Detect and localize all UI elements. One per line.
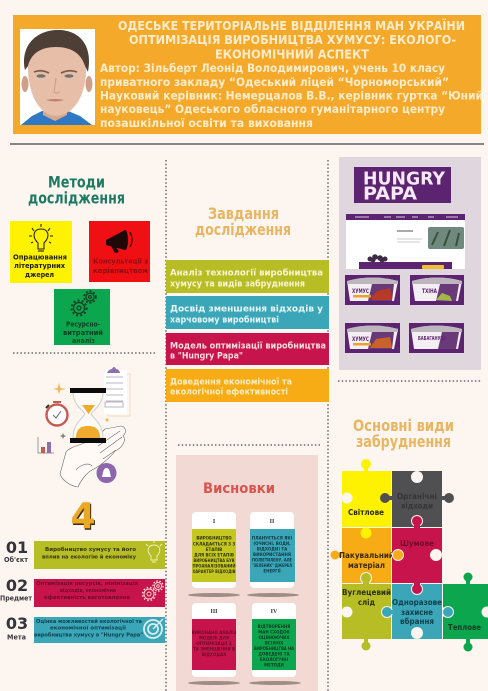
- card: conclusion III: МОДЕЛІ ДЛЯ: [199, 636, 229, 640]
- card: conclusion II: ВИКОРИСТАННЯ: [253, 552, 291, 557]
- card: conclusion I: ПРОАНАЛІЗОВАНИЙ: [192, 564, 236, 568]
- website screenshot: [346, 214, 465, 269]
- icon: sparkles: [53, 383, 108, 439]
- card: conclusion IV: ОЦІНЮЮЧИХ: [258, 635, 290, 640]
- row: subject: [0, 576, 165, 607]
- heading: pollution types: [353, 416, 454, 451]
- icon: target: [144, 619, 163, 638]
- product: hummus tub 4: [409, 323, 464, 353]
- card: conclusion III: ОПТИМІЗАЦІЇ З: [196, 641, 232, 646]
- card: consultation: Консультації з: [93, 256, 148, 266]
- card: conclusion IV: IV: [271, 609, 278, 615]
- card: conclusion II: ЕНЕРГІЇ: [263, 568, 281, 574]
- card: conclusion IV: ВИРОБНИЦТВА НА: [254, 646, 295, 651]
- card: conclusion I: ДЛЯ ВСІХ ЕТАПІВ: [194, 552, 234, 558]
- card: conclusion IV: МЕТОДИ: [264, 662, 284, 668]
- header author text: [100, 61, 483, 130]
- header title: ОПТИМІЗАЦІЯ ВИРОБНИЦТВА ХУМУСУ: ЕКОЛОГО-: [129, 33, 456, 47]
- row: object: Об'єкт: [4, 556, 28, 564]
- heading: conclusions: Висновки: [203, 481, 275, 497]
- piece: packaging: матеріал: [348, 560, 385, 570]
- row: goal: виробництва хумусу в "Hungry Papa": [34, 632, 143, 638]
- piece: disposable clothing: Одноразове: [392, 598, 443, 607]
- card: conclusion I: I: [213, 519, 216, 525]
- row: object: Виробництво хумусу та його: [45, 546, 136, 553]
- card: conclusion II: ВІДХОДИ) ТА: [257, 546, 288, 552]
- card: conclusion III: ВИКОНАНО АНАЛІЗ: [192, 630, 237, 635]
- task 3: в "Hungry Papa": [170, 352, 243, 362]
- card: conclusion III: III: [210, 609, 218, 615]
- card: resource analysis: аналіз: [72, 337, 95, 345]
- row: subject: Предмет: [0, 594, 32, 602]
- product: hummus tub 3: ХУМУС: [352, 336, 369, 343]
- header author text: приватного закладу “Одеський ліцей “Чорноморський”: [100, 75, 449, 89]
- heading: methods: дослідження: [28, 188, 125, 208]
- task 3: Модель оптимізації виробництва: [170, 340, 326, 352]
- card: conclusion II: "ЗЕЛЕНИХ" ДЖЕРЕЛ: [252, 563, 292, 568]
- piece: organic waste: Органічні: [397, 491, 437, 501]
- task 4: екологічної ефективності: [170, 386, 288, 398]
- row: object: вплив на екологію й економіку: [42, 554, 136, 560]
- card: conclusion I: ВИРОБНИЦТВО: [196, 536, 232, 540]
- number: four: 4: [71, 498, 97, 538]
- task 4: [166, 369, 329, 402]
- piece: packaging: Пакувальний: [339, 551, 394, 560]
- row: goal: [6, 614, 165, 643]
- logo: [354, 167, 451, 204]
- piece: noise: [392, 516, 442, 583]
- product: hummus tub 1: [345, 275, 400, 305]
- card: conclusion I: ЕТАПІВ: [206, 547, 222, 552]
- piece: carbon footprint: [342, 572, 391, 650]
- row: goal: економічної оптимізації: [50, 626, 126, 632]
- card: conclusion IV: ВІДТВОРЕННЯ: [258, 624, 290, 629]
- card: conclusion IV: ДОВЕДЕНІ ТА: [258, 652, 290, 656]
- card: literature: [10, 221, 72, 283]
- task 2: [166, 296, 329, 329]
- product: hummus tub 3: [345, 323, 400, 353]
- panel: tasks: [166, 204, 329, 402]
- row: object: [4, 538, 165, 569]
- product: hummus tub 2: ТХІНА: [422, 288, 437, 295]
- header author text: Автор: Зільберт Леонід Володимирович, учень 10 класу: [100, 61, 445, 75]
- heading: pollution types: Основні види: [353, 416, 454, 435]
- card: conclusion II: II: [270, 519, 275, 525]
- piece: organic waste: [380, 471, 454, 527]
- icon: hand: [60, 426, 125, 487]
- heading: tasks: [195, 204, 291, 239]
- piece: organic waste: відходи: [401, 500, 433, 510]
- piece: carbon footprint: слід: [358, 597, 375, 607]
- photo: author portrait: [20, 29, 95, 125]
- row: goal: 03: [6, 614, 28, 633]
- card: resource analysis: Ресурсно-: [66, 320, 100, 328]
- task 2: харчовому виробництві: [170, 314, 279, 326]
- card: conclusion I: СКЛАДАЄТЬСЯ З 3: [193, 542, 235, 546]
- piece: noise: Шумове: [400, 539, 435, 548]
- puzzle: pollution types: [330, 459, 488, 652]
- card: resource analysis: [54, 289, 110, 345]
- header title: ОДЕСЬКЕ ТЕРИТОРІАЛЬНЕ ВІДДІЛЕННЯ МАН УКРАЇНИ: [118, 18, 465, 33]
- panel: header: [13, 15, 483, 134]
- illustration: hourglass in hand: [38, 367, 130, 487]
- logo: PAPA: [363, 184, 417, 204]
- product: hummus tub 1: ХУМУС: [352, 288, 369, 295]
- card: conclusion I: [188, 512, 240, 597]
- icon: small chart: [38, 437, 54, 453]
- task 1: хумусу та видів забруднення: [170, 278, 305, 290]
- logo: HUNGRY: [363, 170, 445, 190]
- card: conclusion II: (ОЧИСНІ, ВОДИ,: [253, 541, 291, 546]
- icon: hourglass: [70, 388, 106, 443]
- icon: outline gears: [142, 581, 163, 600]
- card: conclusion III: ВІДХОДАХ: [202, 652, 226, 657]
- icon: megaphone: [106, 230, 132, 253]
- card: consultation: керівництвом: [93, 266, 148, 275]
- task 2: Досвід зменшення відходів у: [170, 304, 323, 314]
- row: subject: 02: [6, 576, 28, 595]
- task 4: Доведення економічної та: [170, 376, 292, 388]
- card: conclusion IV: [249, 603, 301, 685]
- heading: methods: Методи: [48, 172, 105, 192]
- piece: disposable clothing: вбрання: [400, 616, 434, 626]
- card: conclusion III: [188, 603, 240, 685]
- card: literature: літературних: [14, 261, 65, 270]
- panel: conclusions: [176, 455, 318, 691]
- piece: light: Світлове: [348, 507, 385, 517]
- panel: methods: [10, 172, 150, 345]
- piece: carbon footprint: Вуглецевий: [342, 588, 391, 597]
- icon: light bulb: [29, 224, 53, 251]
- card: conclusion II: ПОЛІЕТИЛЕНУ, АЛЕ: [252, 558, 292, 562]
- card: conclusion I: ВИРОБНИЦТВА БУВ: [194, 558, 234, 563]
- header title: ЕКОНОМІЧНИЙ АСПЕКТ: [215, 46, 370, 62]
- task 1: [166, 260, 329, 293]
- number: four: 4: [70, 496, 96, 537]
- product: hummus tub 4: БАБАГАНУШ: [418, 336, 445, 342]
- icon: clipboard: [104, 367, 130, 416]
- heading: tasks: дослідження: [195, 220, 291, 239]
- card: literature: джерел: [25, 270, 54, 279]
- row: object: 01: [6, 538, 28, 557]
- piece: disposable clothing: [382, 582, 454, 639]
- card: conclusion IV: МАН СХОДОК: [258, 630, 290, 634]
- row: goal: Оцінка можливостей екологічної та: [36, 618, 142, 625]
- heading: pollution types: забруднення: [356, 432, 451, 451]
- card: conclusion IV: ЕКОЛОГІЧНІ: [260, 657, 289, 662]
- piece: packaging: [330, 528, 394, 583]
- piece: thermal: Теплове: [448, 623, 481, 632]
- header author text: науковець” Одеського обласного гуманітарного центру: [100, 102, 445, 116]
- heading: methods: [28, 172, 125, 208]
- icon: gears: [72, 291, 96, 316]
- card: consultation: [89, 221, 150, 282]
- card: conclusion III: ТА ЗМЕНШЕННЯ В: [193, 646, 235, 652]
- icon: outline bulb: [146, 541, 162, 562]
- icon: bell badge: [96, 463, 116, 483]
- row: subject: Оптимізація ресурсів, мінімізація: [36, 581, 139, 587]
- card: conclusion II: ПЛАНУЄТЬСЯ ЯКІ: [252, 536, 293, 540]
- card: conclusion I: ХАРАКТЕР ВІДХОДІВ: [192, 569, 236, 574]
- icon: stopwatch: [46, 401, 68, 426]
- task 1: Аналіз технології виробництва: [170, 268, 323, 278]
- card: conclusion IV: ВСІХНІХ: [265, 640, 283, 646]
- row: subject: відходів, економічна: [60, 588, 116, 594]
- card: resource analysis: витратний: [63, 329, 103, 337]
- piece: light: [342, 459, 391, 527]
- task 3: [166, 333, 329, 365]
- header title: [118, 18, 465, 62]
- panel: Hungry Papa: [339, 157, 481, 370]
- card: conclusion II: [247, 512, 299, 597]
- row: subject: ефективність виготовлення: [44, 594, 131, 601]
- product: hummus tub 2: [410, 275, 464, 305]
- piece: disposable clothing: захисне: [401, 608, 433, 617]
- card: literature: Опрацювання: [13, 252, 67, 262]
- header author text: позашкільної освіти та виховання: [100, 116, 313, 130]
- row: goal: Мета: [7, 634, 26, 642]
- heading: tasks: Завдання: [208, 204, 279, 223]
- piece: thermal: [442, 572, 488, 652]
